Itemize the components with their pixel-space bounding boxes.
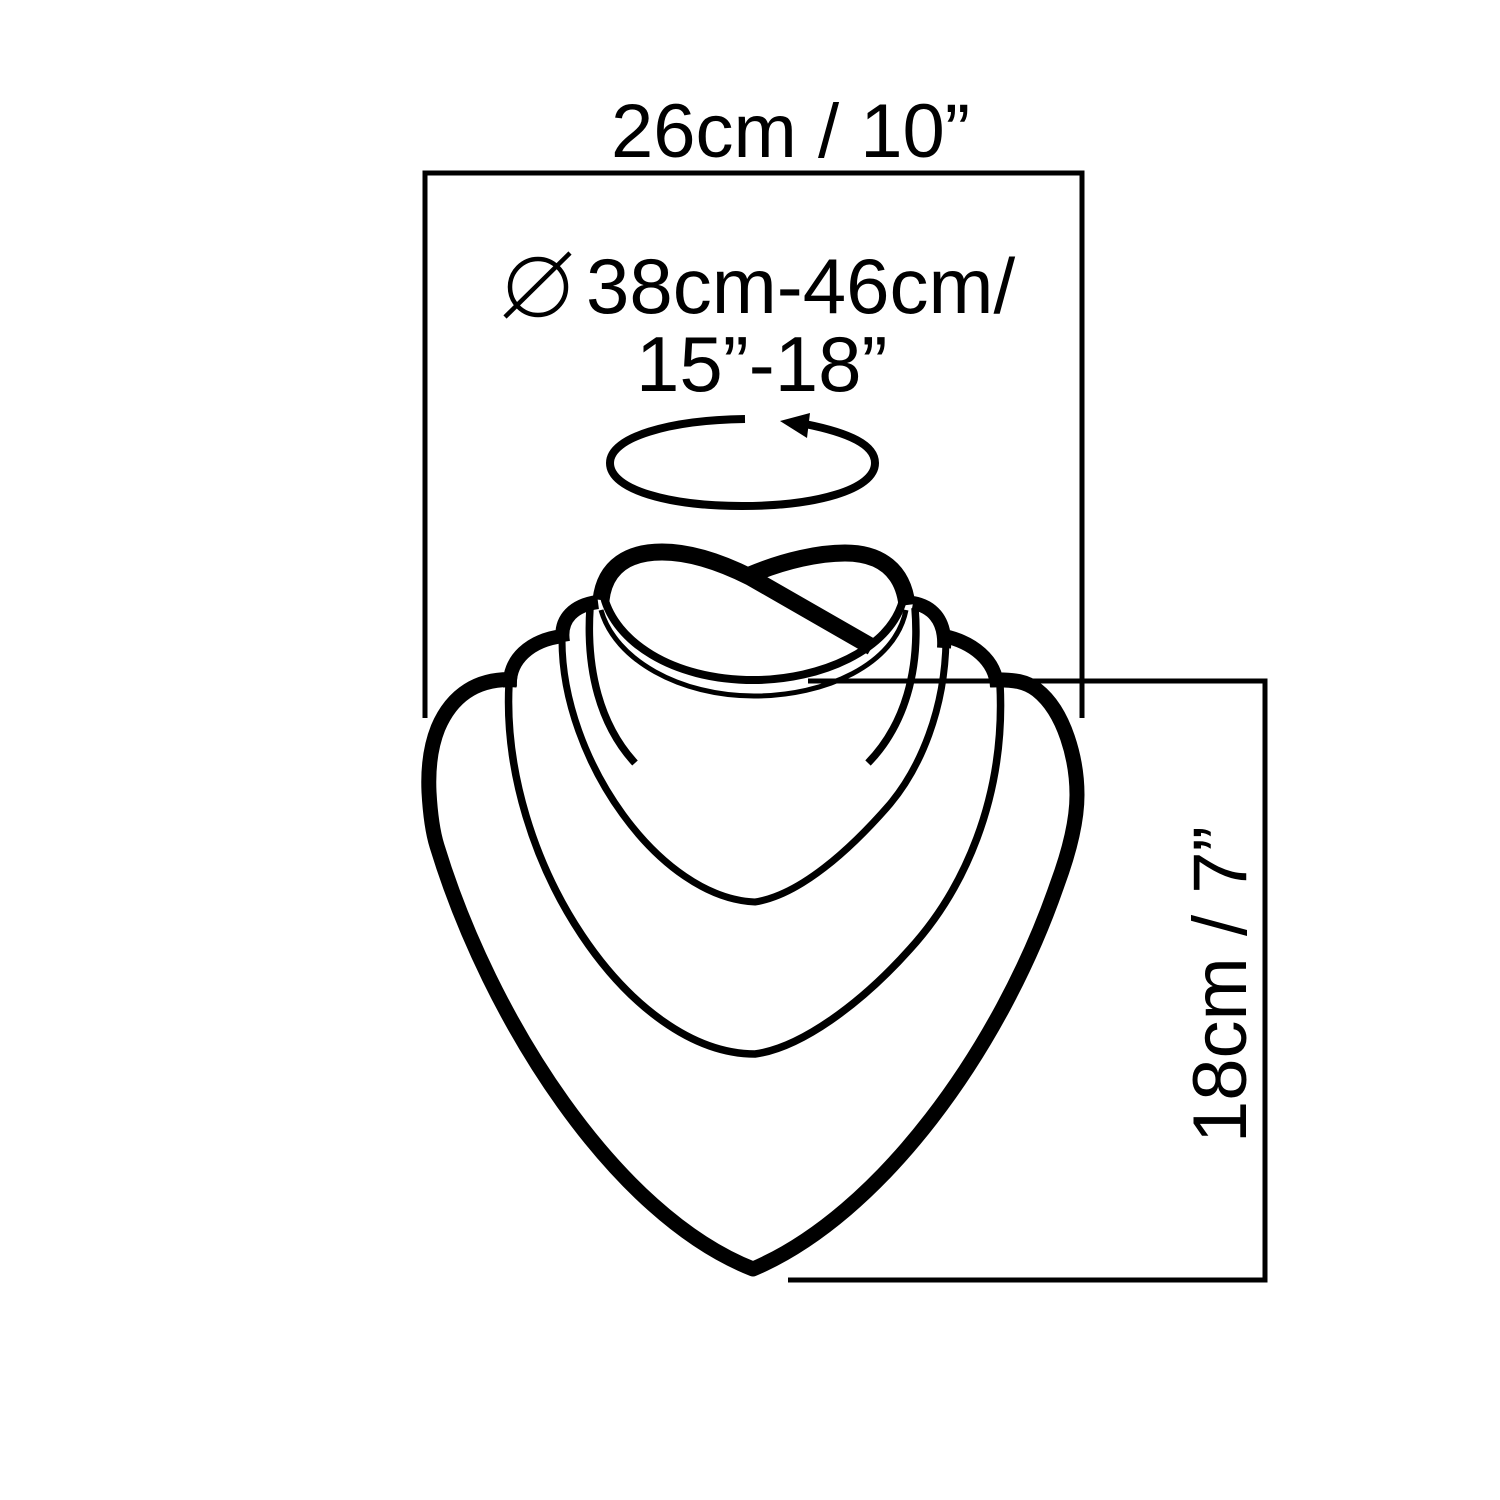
- left strap strand: [589, 608, 635, 763]
- width bracket: [425, 173, 1082, 718]
- right strap strand: [868, 608, 916, 763]
- right collar loop: [750, 553, 907, 605]
- outer bib edge: [429, 680, 1077, 1269]
- neck circumference label: 15”-18”: [636, 320, 887, 408]
- neck outer trim: [601, 610, 906, 696]
- middle fold line: [509, 684, 1001, 1054]
- inner fold line: [562, 640, 946, 902]
- height label: 18cm / 7”: [1178, 826, 1263, 1143]
- illustration: bandana bib: [429, 552, 1077, 1269]
- icon: circular arrow: [610, 413, 875, 506]
- icon: diameter symbol: [505, 253, 570, 317]
- neck circumference label: [586, 242, 1015, 408]
- height bracket: [788, 681, 1265, 1280]
- left shoulder folds: [510, 602, 598, 687]
- left collar loop with crossing strap: [601, 552, 872, 647]
- width label: 26cm / 10”: [611, 89, 970, 174]
- neck circumference label: 38cm-46cm/: [586, 242, 1015, 330]
- right shoulder folds: [913, 603, 997, 687]
- neck opening: [604, 597, 903, 680]
